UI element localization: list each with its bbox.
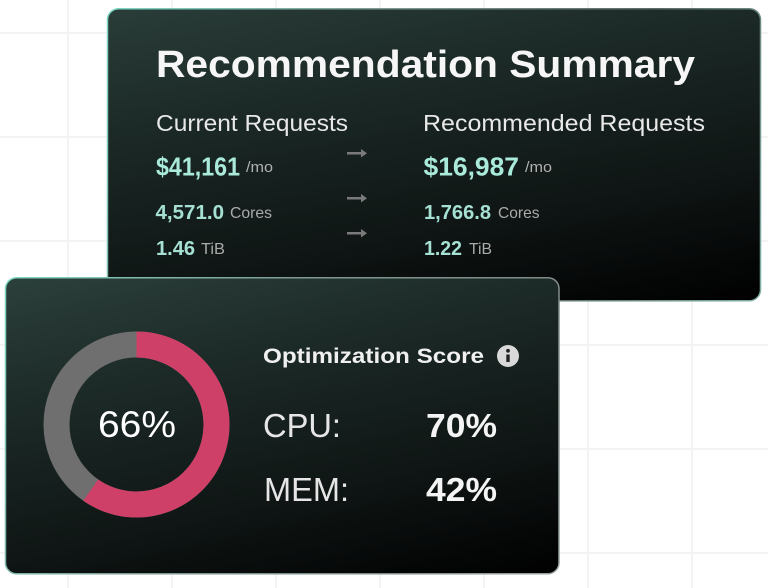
MEM row: 42% (426, 471, 497, 508)
donut chart: 66% (56, 344, 216, 504)
column heading: Current Requests: Current Requests (156, 110, 348, 136)
current cores (156, 202, 272, 224)
current memory: TiB (201, 241, 225, 258)
panel background (6, 278, 559, 574)
current memory: 1.46 (156, 238, 195, 260)
heading: Optimization Score: Optimization Score (263, 345, 484, 368)
recommended cores: 1,766.8 (424, 202, 491, 224)
current cores: 4,571.0 (156, 202, 224, 224)
CPU row: 70% (426, 407, 497, 444)
panel: optimization score (6, 278, 559, 574)
recommended cores (424, 202, 540, 224)
heading: Recommendation Summary: Recommendation Summary (156, 44, 695, 86)
recommended cost: /mo (525, 159, 552, 176)
donut label: 66% (98, 404, 176, 445)
current cost: /mo (246, 159, 273, 176)
arrow: memory (347, 229, 367, 238)
arrow: cores (347, 194, 367, 202)
CPU row: CPU: (263, 407, 341, 444)
arrow: cost (347, 149, 367, 158)
recommended cost: $16,987 (424, 152, 519, 182)
current memory (156, 238, 225, 260)
column heading: Recommended Requests: Recommended Requests (423, 110, 705, 136)
icon: info (497, 345, 519, 367)
ring track (56, 344, 216, 504)
MEM row (264, 471, 497, 508)
recommended memory (424, 238, 492, 260)
panel: recommendation summary (108, 9, 760, 301)
recommended memory: TiB (469, 241, 492, 258)
recommended memory: 1.22 (424, 238, 462, 260)
ring value (91, 344, 216, 504)
current cores: Cores (230, 205, 272, 222)
current cost: $41,161 (156, 152, 240, 182)
CPU row (263, 407, 497, 444)
MEM row: MEM: (264, 471, 349, 508)
recommended cores: Cores (498, 205, 540, 222)
panel background (108, 9, 760, 301)
